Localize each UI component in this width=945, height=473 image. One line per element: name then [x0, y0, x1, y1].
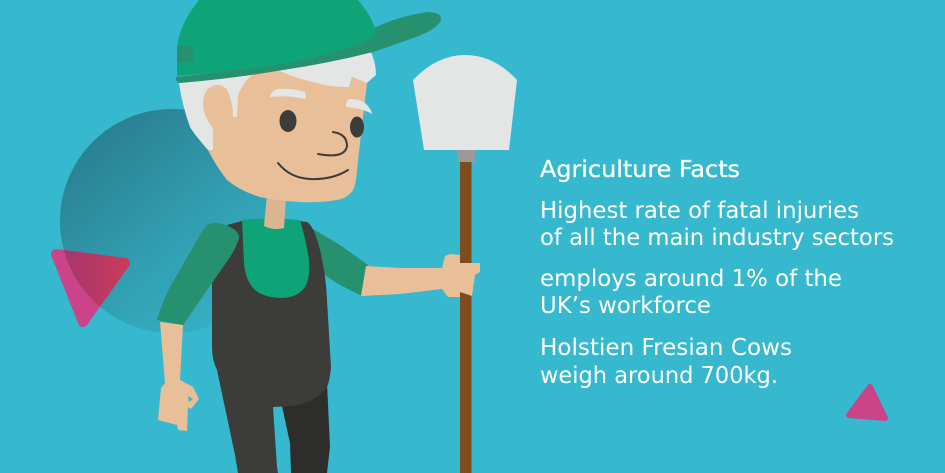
right leg — [282, 383, 330, 473]
right sleeve — [308, 226, 368, 296]
fact: cows: Holstien Fresian Cows — [540, 333, 792, 361]
hair front — [277, 50, 376, 87]
neck — [264, 195, 286, 229]
right eye — [350, 116, 364, 138]
hat dome — [177, 0, 376, 76]
left arm and fist — [158, 322, 199, 431]
fact: fatal injuries: of all the main industry sectors — [540, 223, 894, 251]
facts text block — [540, 155, 894, 389]
heading: Agriculture Facts — [540, 155, 740, 183]
shovel ferrule — [457, 150, 475, 162]
hat patch — [177, 45, 194, 63]
hat brim — [176, 12, 441, 83]
nose — [318, 132, 347, 155]
shovel handle — [460, 162, 472, 473]
shirt bib — [242, 218, 309, 298]
pink triangle, left — [56, 254, 125, 322]
head — [179, 50, 376, 202]
fact: fatal injuries: Highest rate of fatal injuries — [540, 196, 859, 224]
decorative circle — [60, 109, 284, 333]
fist gap — [188, 396, 193, 402]
fact: workforce: employs around 1% of the — [540, 264, 842, 292]
smile — [278, 163, 348, 179]
farmer character — [157, 0, 517, 473]
left sleeve — [157, 223, 239, 325]
ear — [203, 85, 233, 140]
overalls — [212, 221, 331, 473]
shovel — [413, 55, 517, 473]
fact: workforce — [540, 264, 842, 319]
left eye — [280, 110, 296, 132]
fact: cows — [540, 333, 792, 389]
right arm and hand — [361, 254, 480, 297]
pink triangle, right — [849, 387, 885, 418]
fact: cows: weigh around 700kg. — [540, 361, 778, 389]
hair back — [179, 75, 252, 150]
shovel blade — [413, 55, 517, 150]
hat — [176, 0, 441, 83]
face — [205, 68, 367, 202]
fact: workforce: UK’s workforce — [540, 291, 711, 319]
fact: fatal injuries — [540, 196, 894, 251]
right eyebrow — [346, 99, 372, 114]
left eyebrow — [270, 89, 306, 99]
